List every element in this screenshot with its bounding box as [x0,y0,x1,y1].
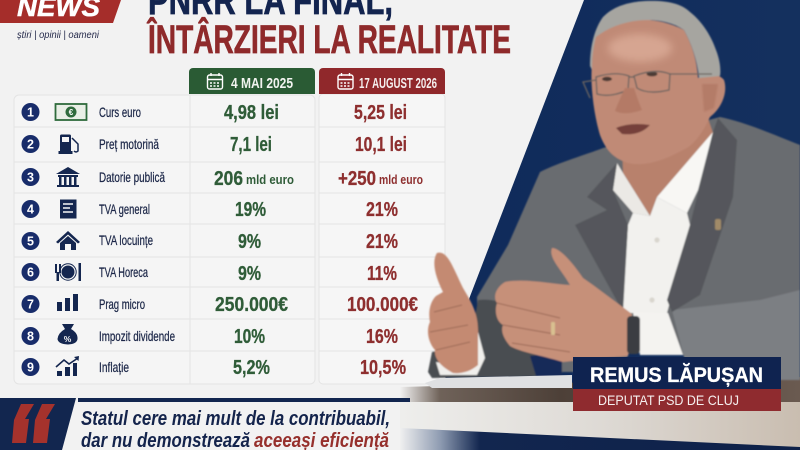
values: 4 mai 2025: 4,98 lei [224,102,279,124]
quote text: Statul cere mai mult de la contribuabil, [81,408,390,430]
title: ÎNTÂRZIERI LA REALITATE [147,16,511,62]
row numbers: 8 [27,330,34,344]
lapel left [575,163,628,312]
row labels: TVA general [99,201,150,217]
left cuff [436,328,485,375]
collar right [657,132,713,213]
values: 17 august 2026: 100.000€ [347,294,418,316]
name plate [573,357,781,411]
values: 17 august 2026: 21% [366,199,398,221]
portrait photo of the speaker [428,1,800,380]
hand right [495,248,632,362]
neck [622,110,713,216]
desk [400,377,800,450]
row labels: Inflație [99,359,129,375]
column header: 17 august 2026 [319,68,445,94]
values: 4 mai 2025: mld euro [246,172,294,187]
table card [14,94,445,384]
right cuff [633,312,683,355]
date: 4 MAI 2025 [231,76,293,92]
lapel pin [715,219,721,230]
wedding ring [551,322,555,335]
mouth [616,124,650,134]
head [591,20,725,164]
icon: money bag [58,324,78,344]
left finger lines [430,305,470,350]
row labels: Curs euro [99,104,141,120]
values: 4 mai 2025: 7,1 lei [230,134,272,156]
papers on desk [425,375,572,388]
row labels: TVA Horeca [99,264,148,280]
row numbers [22,103,40,376]
icon: receipt [60,200,76,218]
finger lines [497,303,570,352]
values: 4 mai 2025: 19% [235,199,266,221]
jacket [477,117,800,380]
hand left [428,253,478,373]
values: 17 august 2026: 21% [366,231,398,253]
row labels [99,104,175,375]
values: 4 mai 2025: 206 [214,168,243,190]
values: 17 august 2026 [338,102,423,379]
nose [615,88,642,113]
values: 17 august 2026: 10,5% [360,357,406,379]
row numbers: 4 [27,202,34,216]
values: 17 august 2026: 10,1 lei [355,134,407,156]
values: 17 august 2026: 11% [367,263,397,285]
icon: plate and cutlery [55,263,81,281]
speaker role: DEPUTAT PSD DE CLUJ [598,392,739,408]
right sleeve [672,290,800,380]
title [147,0,511,62]
values: 4 mai 2025: 10% [234,326,265,348]
row numbers: 9 [27,360,34,374]
icon: house [56,231,80,250]
values: 4 mai 2025: 250.000€ [215,294,288,316]
brand banner [0,0,121,23]
values: 17 august 2026: 16% [366,326,398,348]
lapel right [667,118,737,312]
values: 17 august 2026: mld euro [379,172,423,187]
left sleeve [428,300,562,378]
brand tagline: știri | opinii | oameni [17,29,100,41]
collar left [613,163,650,216]
row labels: Preț motorină [99,136,159,152]
icon: bank building [56,167,80,187]
icon: calendar green [208,73,222,89]
values: 4 mai 2025: 9% [238,263,261,285]
navy backdrop behind portrait [434,0,800,390]
row labels: Prag micro [99,296,145,312]
values: 17 august 2026: +250 [338,168,376,190]
eyes [602,72,658,81]
shirt buttons [649,237,660,303]
icon: banknote [56,104,86,120]
icon: calendar red [338,73,353,89]
icon: money bag: % [64,334,72,344]
quote band [0,398,410,450]
row labels: Impozit dividende [99,328,175,344]
shirt [622,197,690,313]
row labels: TVA locuințe [99,232,153,248]
navy gap under arm [530,352,562,376]
row labels: Datorie publică [99,169,165,185]
ear shading [702,84,718,112]
icon: bar chart [57,294,78,311]
row numbers: 5 [27,234,34,248]
values: 17 august 2026: 5,25 lei [354,102,407,124]
row numbers: 1 [27,106,34,120]
values: 4 mai 2025 [214,102,294,379]
forehead highlight [608,34,672,62]
row numbers: 2 [27,138,34,152]
row numbers: 3 [27,170,34,184]
icon: fuel pump [58,134,78,154]
quote mark [12,404,55,443]
values: 4 mai 2025: 5,2% [233,357,270,379]
date: 17 AUGUST 2026 [359,76,437,92]
column header: 4 mai 2025 [189,68,315,94]
values: 4 mai 2025: 9% [238,231,261,253]
row numbers: 6 [27,266,34,280]
icon: banknote: € [69,108,74,117]
hair [590,1,720,78]
speaker name: REMUS LĂPUȘAN [590,364,763,387]
glasses [583,71,712,98]
watch [627,316,640,354]
row numbers: 7 [27,298,34,312]
icon: rising chart [56,356,79,376]
